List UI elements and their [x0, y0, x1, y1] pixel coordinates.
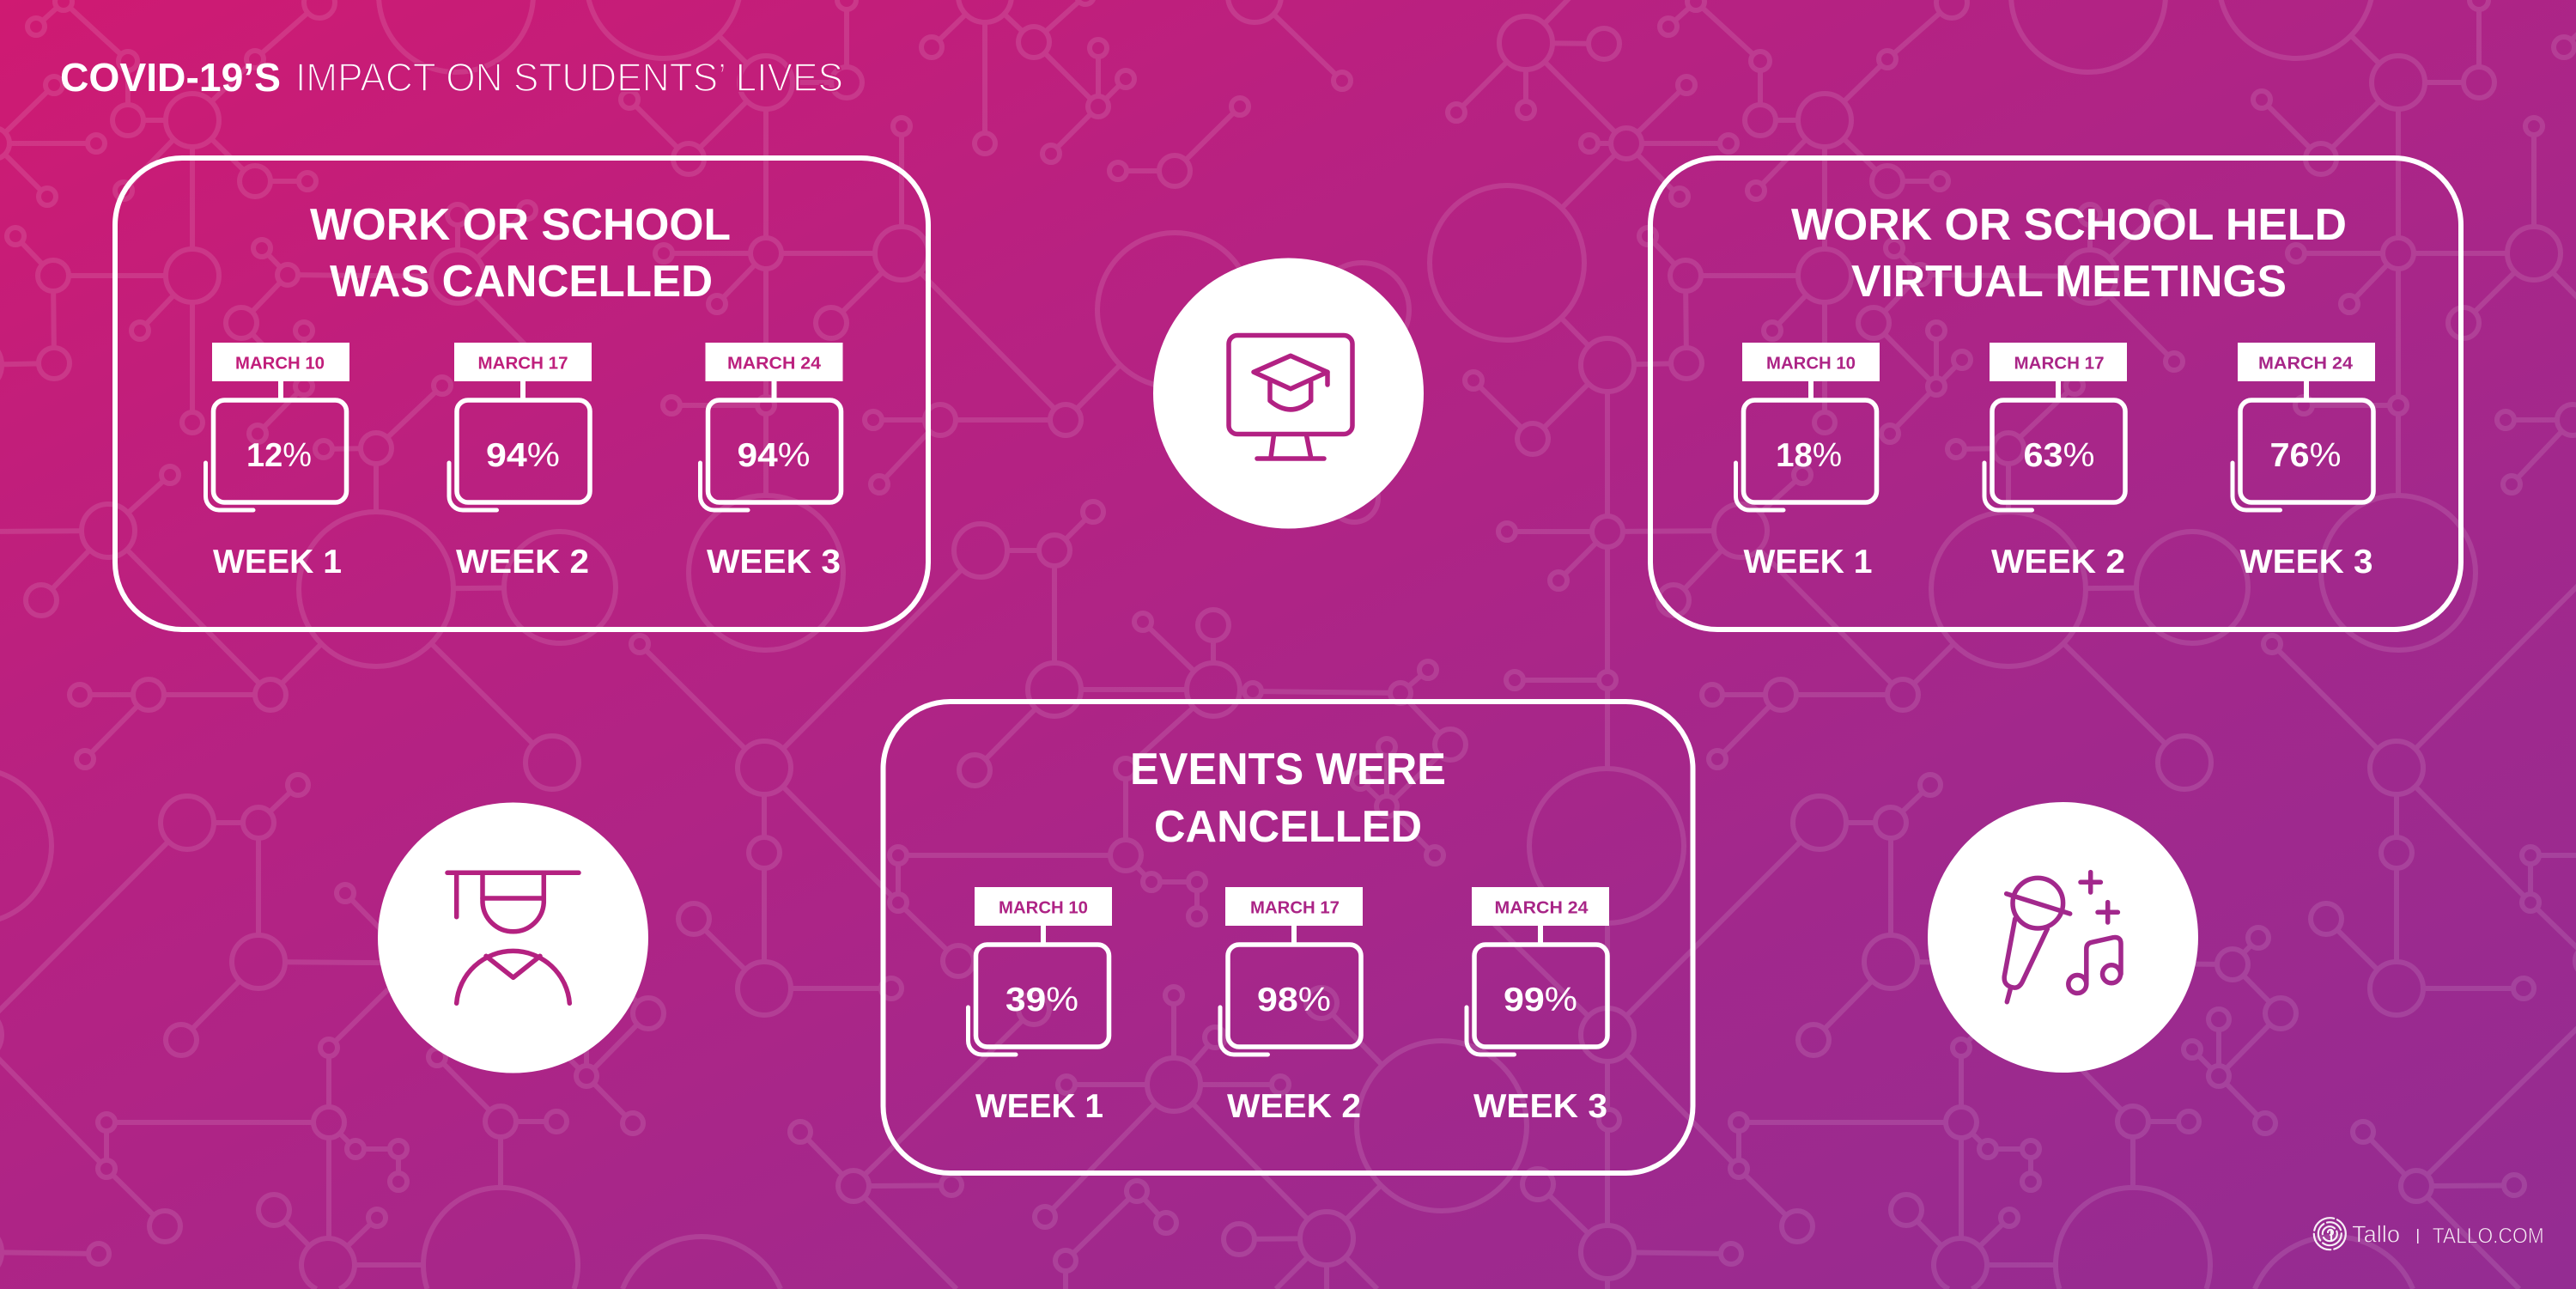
stat card: week 1	[206, 343, 349, 581]
stat card: week 2	[1220, 887, 1363, 1125]
icon: microphone and music notes	[1928, 802, 2198, 1073]
stat card: week 2: WEEK 2	[1227, 1088, 1361, 1125]
stat card: week 1: MARCH 10	[999, 898, 1088, 917]
stat card: week 2: 98%	[1257, 982, 1331, 1018]
stat card: week 3: 76%	[2270, 437, 2341, 474]
stat card: week 1	[969, 887, 1112, 1125]
stat card: week 1: MARCH 10	[1766, 354, 1856, 373]
panel heading	[310, 200, 731, 307]
panel frame	[1650, 158, 2461, 629]
panel: work or school was cancelled	[115, 158, 928, 629]
panel frame	[115, 158, 928, 629]
stat card: week 3: MARCH 24	[727, 354, 822, 373]
stat card: week 2: MARCH 17	[1250, 898, 1340, 917]
stat card: week 1: 18%	[1776, 437, 1842, 474]
stat card: week 1	[1736, 343, 1880, 581]
stat card: week 2	[449, 343, 592, 581]
panel heading: EVENTS WERE	[1130, 745, 1446, 794]
stat card: week 3	[1467, 887, 1609, 1125]
stat card: week 3	[701, 343, 843, 581]
stat card: week 1: MARCH 10	[235, 354, 325, 373]
stat card: week 3: 99%	[1504, 982, 1577, 1018]
panel: events were cancelled	[883, 702, 1693, 1173]
stat card: week 2: 94%	[486, 437, 560, 474]
stat card: week 1: 39%	[1005, 982, 1078, 1018]
logo: Tallo	[2314, 1218, 2544, 1249]
stat card: week 1: WEEK 1	[975, 1088, 1103, 1125]
stat card: week 2: WEEK 2	[1991, 544, 2125, 581]
panel frame	[883, 702, 1693, 1173]
stat card: week 3: WEEK 3	[707, 544, 841, 581]
stat card: week 2	[1984, 343, 2127, 581]
stat card: week 2: MARCH 17	[477, 354, 568, 373]
stat card: week 1: WEEK 1	[1743, 544, 1872, 581]
panel heading	[1130, 745, 1446, 852]
panel: work or school held virtual meetings	[1650, 158, 2461, 629]
panel heading	[1791, 200, 2347, 307]
stat card: week 1: WEEK 1	[213, 544, 342, 581]
logo: Tallo: TALLO.COM	[2433, 1224, 2544, 1248]
panel heading: WORK OR SCHOOL	[310, 200, 731, 250]
stat card: week 3: WEEK 3	[2239, 544, 2373, 581]
panel heading: VIRTUAL MEETINGS	[1851, 257, 2287, 307]
title: IMPACT ON STUDENTS’ LIVES	[295, 55, 843, 100]
logo: Tallo: Tallo	[2352, 1221, 2400, 1248]
stat card: week 3: 94%	[737, 437, 811, 474]
title: COVID-19’S	[60, 55, 281, 100]
stat card: week 2: WEEK 2	[456, 544, 589, 581]
stat card: week 2: MARCH 17	[2014, 354, 2104, 373]
panel heading: CANCELLED	[1154, 802, 1422, 852]
stat card: week 3: MARCH 24	[1494, 898, 1589, 917]
stat card: week 3	[2233, 343, 2375, 581]
stat card: week 3: WEEK 3	[1473, 1088, 1607, 1125]
stat card: week 1: 12%	[246, 437, 312, 474]
icon: graduate student	[378, 802, 648, 1073]
panel heading: WAS CANCELLED	[330, 257, 713, 307]
icon: monitor with graduation cap	[1153, 258, 1424, 529]
title	[60, 55, 843, 100]
stat card: week 3: MARCH 24	[2258, 354, 2354, 373]
panel heading: WORK OR SCHOOL HELD	[1791, 200, 2347, 250]
stat card: week 2: 63%	[2023, 437, 2095, 474]
